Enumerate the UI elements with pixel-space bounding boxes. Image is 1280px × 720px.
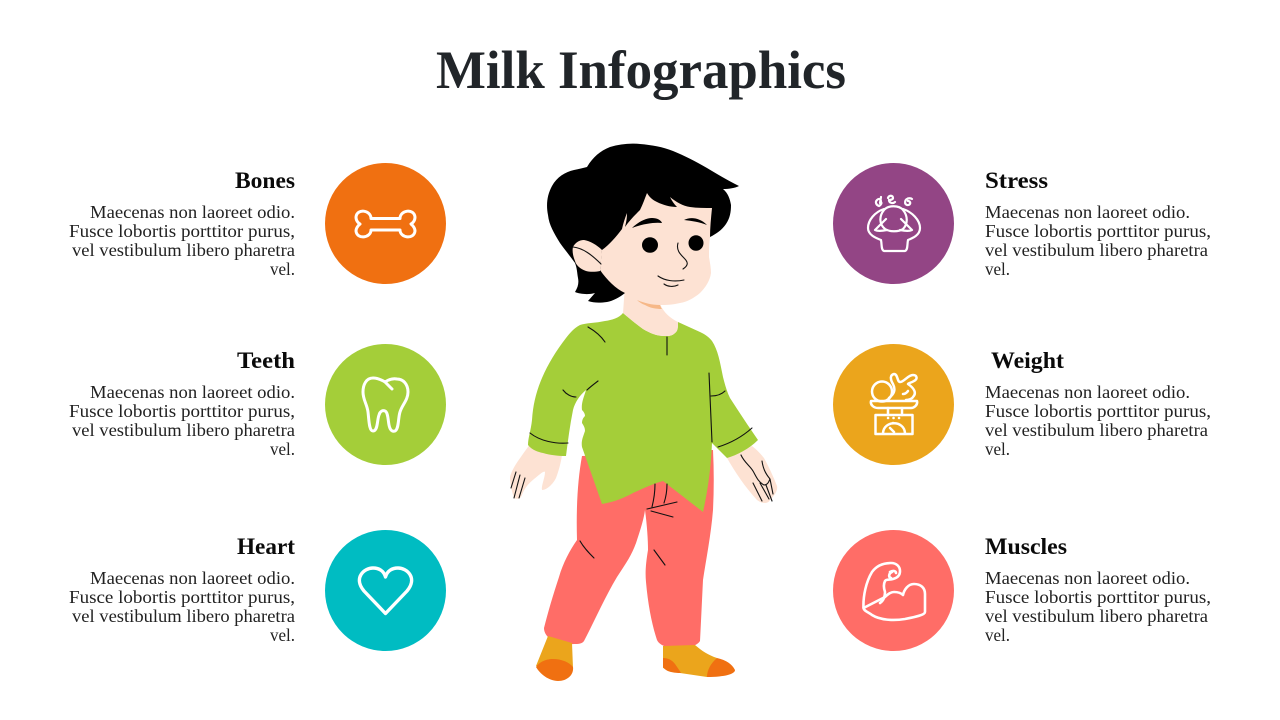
- heading: muscles: Muscles: [985, 534, 1067, 559]
- text block: stress: Maecenas non laoreet odio.: [985, 202, 1190, 222]
- text block: teeth: vel.: [270, 439, 295, 459]
- face: [600, 193, 712, 305]
- pants: [544, 450, 714, 648]
- text block: bones: Maecenas non laoreet odio.: [90, 202, 295, 222]
- illustration: child: [510, 144, 777, 681]
- text block: teeth: vel vestibulum libero pharetra: [72, 420, 295, 440]
- text block: heart: vel vestibulum libero pharetra: [72, 606, 295, 626]
- clothing fold lines: [511, 327, 773, 565]
- panel: bones: [69, 163, 446, 284]
- text block: muscles: Fusce lobortis porttitor purus,: [985, 587, 1211, 607]
- right sock: [663, 645, 735, 677]
- text block: weight: vel vestibulum libero pharetra: [985, 420, 1208, 440]
- neck shadow: [637, 300, 662, 309]
- heading: teeth: Teeth: [237, 348, 295, 373]
- text block: heart: Fusce lobortis porttitor purus,: [69, 587, 295, 607]
- icon: heart: [325, 530, 446, 651]
- panel: teeth: [69, 344, 446, 465]
- text block: heart: [69, 568, 295, 645]
- icon: stressed person: [833, 163, 954, 284]
- title: Milk Infographics: [436, 40, 846, 100]
- heading: weight: Weight: [991, 348, 1064, 373]
- icon: flexed arm: [833, 530, 954, 651]
- text block: stress: Fusce lobortis porttitor purus,: [985, 221, 1211, 241]
- text block: bones: vel.: [270, 259, 295, 279]
- text block: muscles: [985, 568, 1211, 645]
- heading: heart: Heart: [237, 534, 295, 559]
- text block: teeth: Maecenas non laoreet odio.: [90, 382, 295, 402]
- panel: stress: [833, 163, 1211, 284]
- panel: muscles: [833, 530, 1211, 651]
- text block: muscles: vel.: [985, 625, 1010, 645]
- text block: weight: vel.: [985, 439, 1010, 459]
- text block: stress: [985, 202, 1211, 279]
- facial features: [573, 218, 707, 286]
- right hand: [727, 446, 777, 503]
- text block: stress: vel vestibulum libero pharetra: [985, 240, 1208, 260]
- left sock: [536, 636, 573, 681]
- hair: [547, 144, 739, 303]
- text block: weight: [985, 382, 1211, 459]
- shirt: [528, 313, 758, 512]
- text block: weight: Maecenas non laoreet odio.: [985, 382, 1190, 402]
- text block: muscles: vel vestibulum libero pharetra: [985, 606, 1208, 626]
- text block: heart: vel.: [270, 625, 295, 645]
- icon: weighing scale with food: [833, 344, 954, 465]
- panel: weight: [833, 344, 1211, 465]
- text block: heart: Maecenas non laoreet odio.: [90, 568, 295, 588]
- icon: tooth: [325, 344, 446, 465]
- text block: stress: vel.: [985, 259, 1010, 279]
- ear: [573, 240, 602, 272]
- heading: bones: Bones: [235, 168, 295, 193]
- heading: stress: Stress: [985, 168, 1048, 193]
- text block: muscles: Maecenas non laoreet odio.: [985, 568, 1190, 588]
- text block: bones: vel vestibulum libero pharetra: [72, 240, 295, 260]
- left hand: [510, 444, 562, 499]
- text block: teeth: Fusce lobortis porttitor purus,: [69, 401, 295, 421]
- text block: weight: Fusce lobortis porttitor purus,: [985, 401, 1211, 421]
- text block: bones: Fusce lobortis porttitor purus,: [69, 221, 295, 241]
- panel: heart: [69, 530, 446, 651]
- icon: bone: [325, 163, 446, 284]
- text block: bones: [69, 202, 295, 279]
- text block: teeth: [69, 382, 295, 459]
- neck: [623, 285, 678, 336]
